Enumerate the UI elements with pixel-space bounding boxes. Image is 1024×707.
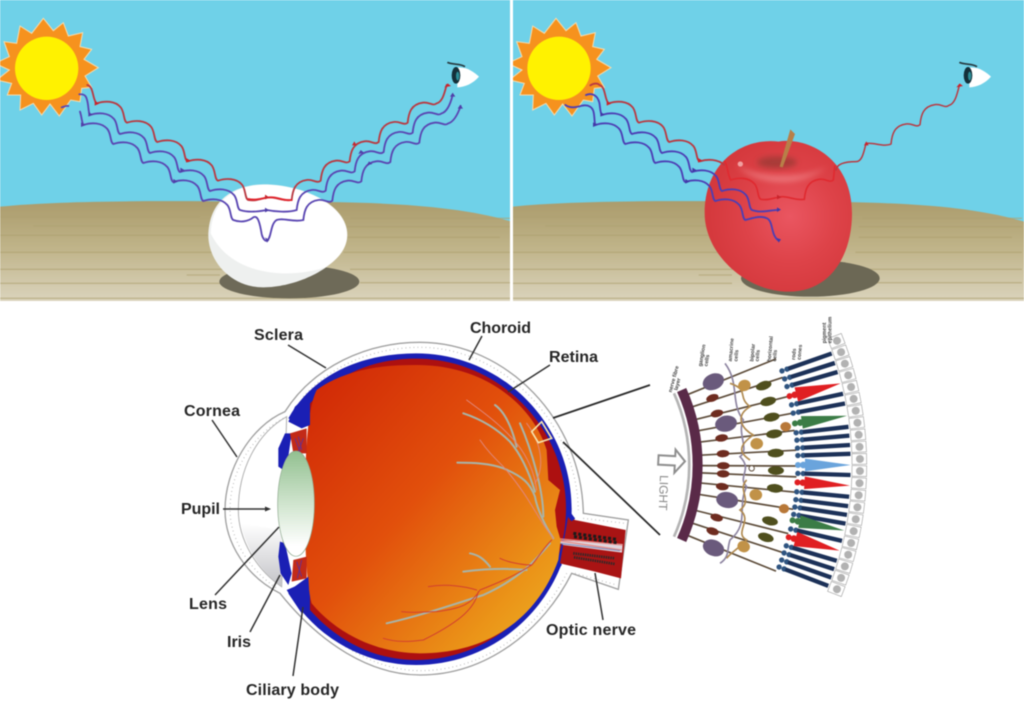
layer labels: bipolar (749, 344, 757, 362)
icon: viewer's eye (447, 62, 479, 87)
icon: sun (0, 18, 98, 116)
anterior chamber (238, 417, 287, 587)
eye part labels (181, 320, 636, 699)
eye part labels: Optic nerve (546, 622, 636, 639)
connecting fibres (685, 359, 797, 571)
bipolar cells (755, 379, 784, 544)
retina layer (310, 359, 566, 660)
nerve fibre band (682, 390, 698, 540)
ganglion cells (700, 370, 739, 560)
layer labels: epithelium (828, 316, 834, 343)
icon: red apple (705, 129, 852, 292)
layer labels: layer (673, 378, 682, 391)
ray arrowheads (593, 83, 963, 243)
optic nerve (553, 513, 626, 578)
diagram: eye cross-section (225, 342, 628, 675)
eye part labels: Iris (227, 634, 251, 651)
light rays: red (87, 85, 447, 200)
layer labels (668, 316, 834, 393)
panel: red apple absorbs blue light (512, 0, 1024, 302)
layer labels: rods (791, 348, 798, 360)
light rays: blue (62, 94, 461, 241)
icon: sun (508, 18, 611, 116)
pigment epithelium (828, 333, 867, 597)
icon: white egg (208, 184, 347, 287)
choroid layer (287, 353, 572, 665)
inner eyeball (305, 365, 561, 653)
table surface (512, 201, 1024, 302)
apple shadow (741, 260, 880, 297)
horizontal and amacrine processes (720, 363, 753, 563)
label: light: LIGHT (656, 475, 671, 511)
eye part labels: Pupil (181, 501, 220, 518)
ciliary body and iris (278, 393, 310, 613)
arrow: light direction (658, 449, 686, 473)
layer labels: nerve fibre (668, 365, 681, 393)
lens (278, 451, 314, 556)
eye part labels: Choroid (470, 320, 531, 337)
arrow: pupil pointer tip (265, 506, 271, 512)
sclera and cornea outer shell (225, 342, 628, 675)
zoom lines to retina detail (553, 385, 660, 535)
leader lines (212, 336, 603, 676)
light rays: blue, absorbed (565, 94, 779, 241)
magnified retina marker (532, 422, 552, 443)
cone cells (784, 376, 851, 558)
eye part labels: Ciliary body (246, 682, 339, 699)
table surface (0, 201, 512, 302)
retinal vessels (383, 400, 553, 641)
panel: white egg reflects all colours (0, 0, 511, 302)
diagram: retina cell layers (656, 316, 867, 597)
layer labels: amacrine (728, 338, 736, 362)
layer labels: ganglion (698, 344, 707, 367)
layer labels: cells (755, 349, 762, 362)
layer labels: cells (733, 349, 740, 362)
layer labels: pigment (822, 322, 828, 343)
horizontal cells (736, 378, 791, 554)
eye part labels: Lens (189, 596, 227, 613)
egg shadow (219, 265, 359, 298)
icon: viewer's eye (959, 62, 991, 87)
eye part labels: Sclera (254, 327, 303, 344)
layer labels: horizontal (767, 335, 775, 362)
ray arrowheads (81, 83, 463, 243)
eye part labels: Cornea (184, 403, 240, 420)
layer labels: cones (797, 344, 804, 360)
light ray: red, reflected (590, 84, 959, 200)
rod cells (776, 351, 851, 588)
sclera stippling (230, 347, 625, 671)
layer labels: cells (703, 354, 711, 367)
eye part labels: Retina (549, 349, 598, 366)
layer labels: cells (772, 349, 779, 362)
